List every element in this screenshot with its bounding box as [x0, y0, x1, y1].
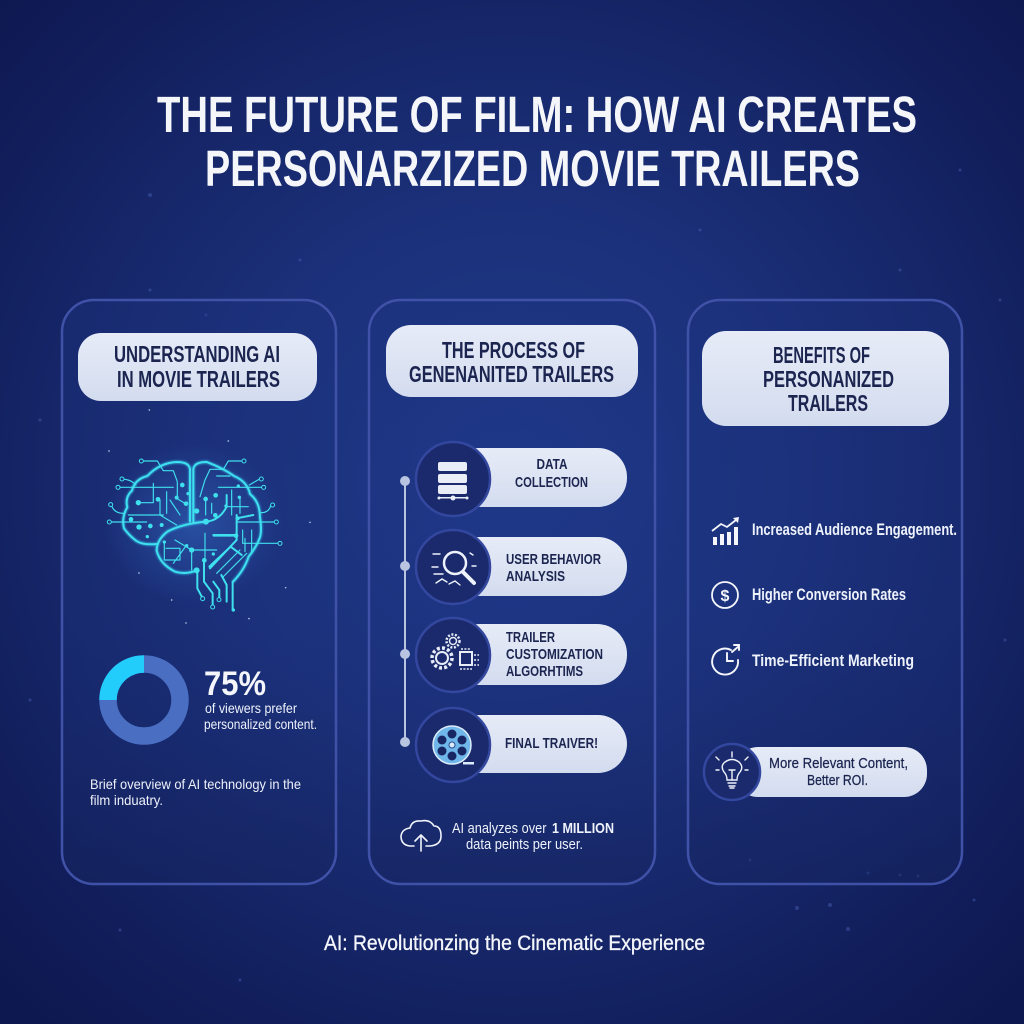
icon: dollar [712, 582, 738, 608]
callout: data points: AI analyzes over [452, 820, 550, 837]
icon: dollar: $ [721, 588, 730, 605]
icon: cloud upload [401, 821, 441, 851]
benefit: time [712, 645, 914, 675]
callout: data points: 1 MILLION [552, 820, 614, 837]
step: data collection: COLLECTION [515, 474, 588, 491]
heading: understanding AI: IN MOVIE TRAILERS [117, 366, 280, 392]
step: customization [416, 618, 627, 692]
icon: film reel [433, 726, 474, 764]
donut chart: 75% [108, 664, 180, 736]
benefit: conversion [712, 582, 906, 608]
step: customization: TRAILER [506, 629, 555, 646]
callout: ROI [704, 744, 927, 800]
callout: ROI: More Relevant Content, [769, 755, 908, 772]
title [157, 86, 917, 197]
step: data collection [416, 442, 627, 516]
heading: benefits: BENEFITS OF [773, 342, 870, 368]
step: customization: ALGORHTIMS [506, 663, 583, 680]
step: final trailer [416, 708, 627, 782]
text: overview: film induatry. [90, 792, 163, 808]
timeline [400, 476, 410, 747]
callout: data points [452, 820, 614, 853]
heading: process: GENENANITED TRAILERS [409, 361, 614, 387]
benefit: time: Time-Efficient Marketing [752, 651, 914, 670]
panel: benefits [688, 300, 962, 884]
step: data collection: DATA [536, 456, 568, 473]
icon: circuit brain [103, 409, 311, 624]
text: overview: Brief overview of AI technology in the [90, 776, 301, 792]
icon: growth chart [712, 517, 739, 545]
icon: clock arrow [712, 645, 739, 675]
heading: process [386, 325, 638, 397]
panel: process [369, 300, 655, 884]
heading: benefits [702, 331, 949, 426]
text: overview [90, 776, 301, 808]
benefit: conversion: Higher Conversion Rates [752, 585, 906, 604]
heading: benefits: PERSONANIZED [763, 366, 894, 392]
icon: magnifier [432, 552, 476, 585]
step: customization: CUSTOMIZATION [506, 646, 603, 663]
heading: understanding AI: UNDERSTANDING AI [114, 341, 280, 367]
step: final trailer: FINAL TRAIVER! [505, 735, 598, 752]
callout: ROI: Better ROI. [807, 772, 868, 789]
step: user behavior: ANALYSIS [506, 568, 565, 585]
step: user behavior: USER BEHAVIOR [506, 551, 601, 568]
heading: process: THE PROCESS OF [442, 337, 585, 363]
stat: 75%: 75% [204, 665, 266, 703]
icon: server [438, 462, 468, 500]
panel: understanding AI [62, 300, 336, 884]
benefit: engagement [712, 517, 957, 545]
stat: 75%: personalized content. [204, 716, 317, 732]
stat: 75%: of viewers prefer [205, 700, 297, 716]
icon: gears and chip [432, 634, 479, 669]
footer tagline: AI: Revolutionzing the Cinematic Experience [324, 932, 705, 955]
heading: benefits: TRAILERS [788, 390, 868, 416]
callout: data points: data peints per user. [466, 836, 583, 853]
stat: 75% [204, 665, 317, 732]
icon: light bulb [716, 752, 748, 788]
step: user behavior [416, 530, 627, 604]
heading: understanding AI [78, 333, 317, 401]
benefit: engagement: Increased Audience Engagement. [752, 520, 957, 539]
